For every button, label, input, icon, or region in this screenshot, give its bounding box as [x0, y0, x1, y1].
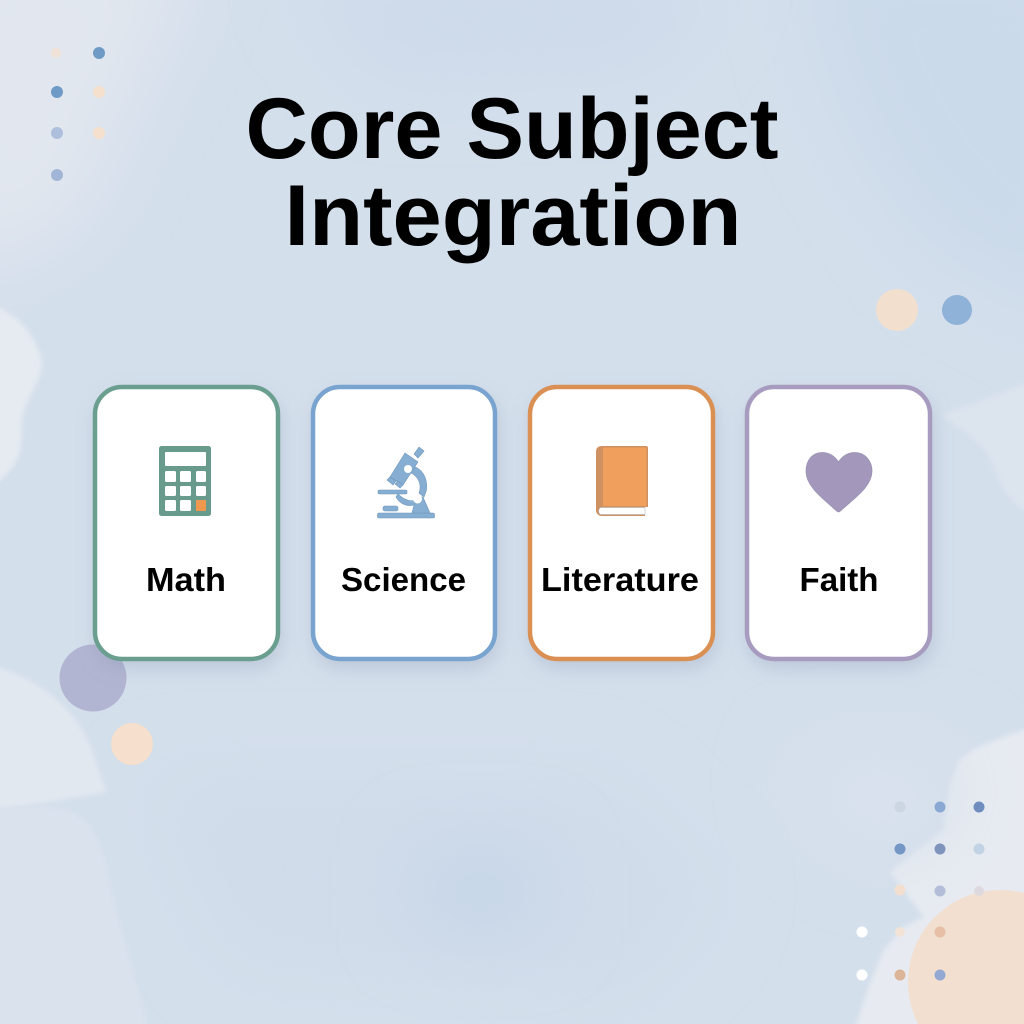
card: Science: [313, 387, 495, 659]
label: Math: Math: [146, 561, 226, 598]
decorative dots: top left: [51, 47, 105, 181]
title: Core Subject: [246, 81, 778, 177]
icon: microscope: [378, 447, 434, 518]
decorative circles: upper right: [876, 289, 972, 331]
card: Math: [95, 387, 278, 659]
icon: calculator: [159, 446, 211, 516]
decorative circle: bottom right: [908, 890, 1024, 1024]
icon: heart: [806, 452, 872, 512]
label: Science: Science: [341, 561, 466, 598]
title: Integration: [284, 168, 742, 264]
card: Faith: [747, 387, 930, 659]
label: Literature: Literature: [541, 561, 699, 598]
decorative circles: lower left: [60, 644, 153, 765]
decorative dots: bottom right: [856, 802, 984, 980]
label: Faith: Faith: [800, 561, 878, 598]
icon: book: [596, 446, 648, 516]
card: Literature: [530, 387, 713, 659]
title: [246, 81, 778, 264]
